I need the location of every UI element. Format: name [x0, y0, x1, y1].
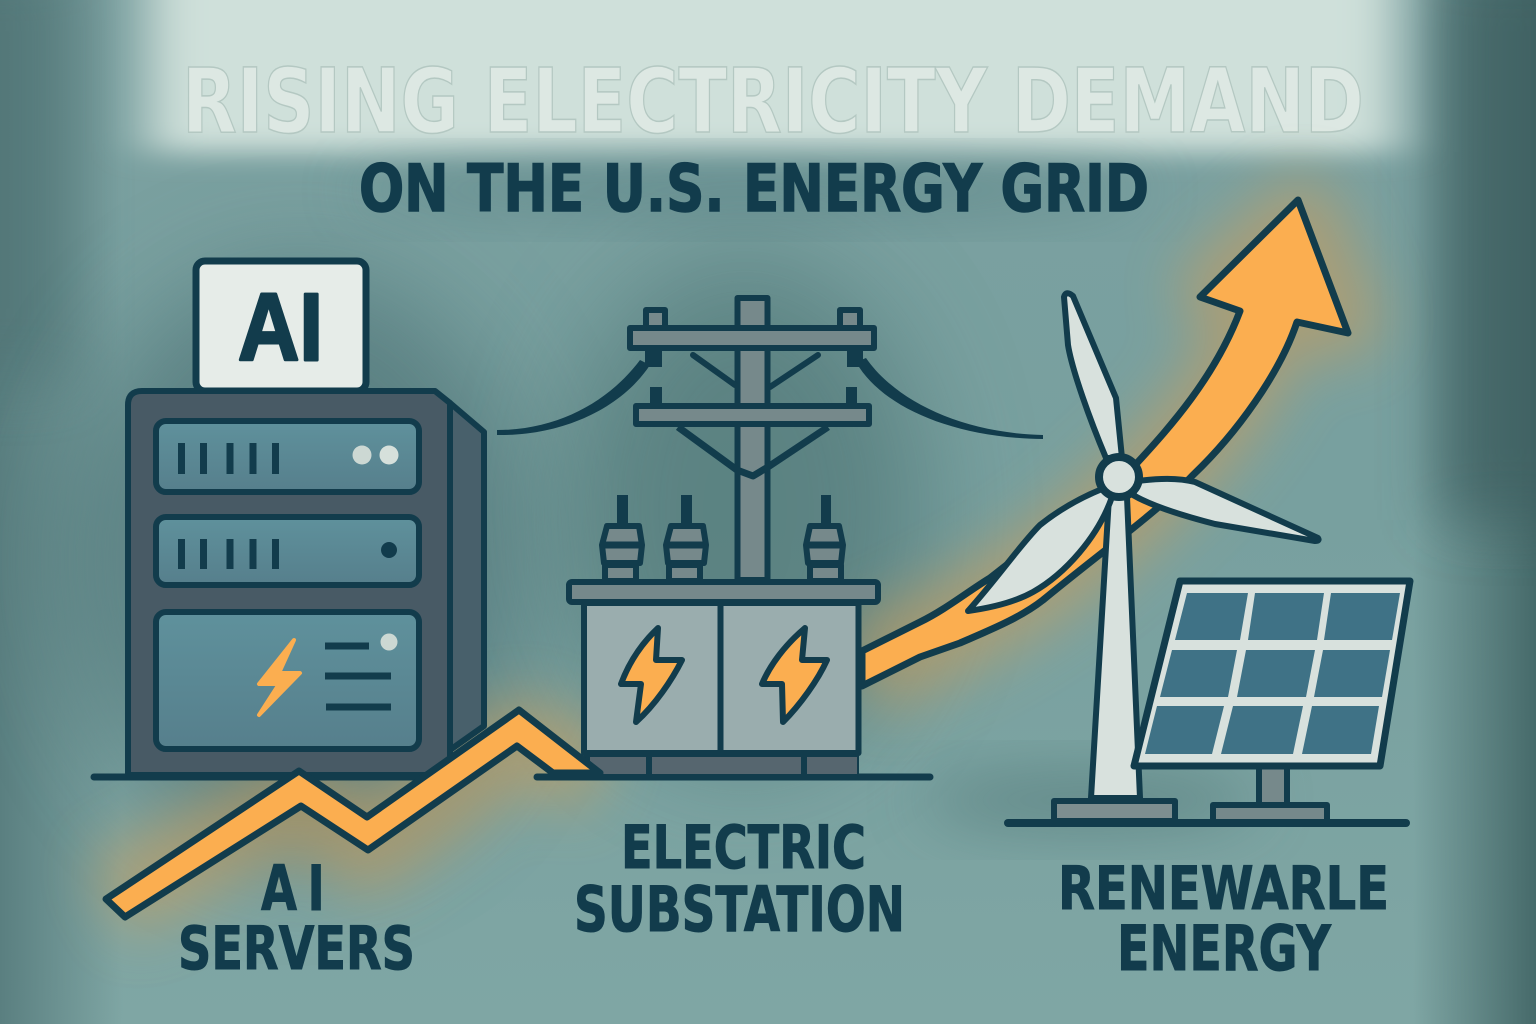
lightning bolt left	[621, 628, 682, 722]
subtitle: ON THE U.S. ENERGY GRID	[359, 152, 1149, 227]
rack body	[128, 391, 450, 775]
panel frame and cells	[1134, 581, 1410, 766]
blades	[968, 293, 1319, 611]
ground line: servers	[94, 774, 440, 780]
lower cross-arm	[636, 387, 869, 424]
AI card	[196, 261, 366, 391]
label: renewable energy	[1058, 854, 1389, 985]
ground line: renewables	[1008, 819, 1406, 827]
transformer cabinets	[584, 603, 720, 753]
pole shaft	[738, 298, 768, 580]
server unit 3	[156, 612, 419, 749]
lightning bolt right	[762, 628, 827, 722]
upper cross-arm	[630, 310, 874, 367]
cross-arm braces	[678, 355, 828, 476]
insulators	[602, 495, 843, 581]
hub	[1099, 457, 1139, 497]
main rising arrow	[862, 200, 1348, 686]
label: renewable energy: RENEWARLE	[1058, 854, 1389, 924]
label: electric substation	[574, 813, 905, 946]
label: AI servers	[178, 852, 415, 984]
transformer cap	[569, 582, 878, 602]
transformer	[569, 495, 878, 775]
power wires	[497, 358, 1043, 439]
tower	[1091, 497, 1140, 798]
server unit 2	[156, 517, 419, 585]
panel stand	[1213, 765, 1327, 822]
transformer base	[584, 750, 859, 775]
AI card: AI	[238, 274, 323, 381]
turbine base	[1054, 801, 1175, 821]
utility pole	[630, 298, 874, 580]
wind turbine	[968, 293, 1319, 821]
lower rising arrow	[106, 710, 600, 917]
orange glow behind arrows	[110, 220, 1340, 900]
solar panel	[1134, 581, 1410, 822]
label: renewable energy: ENERGY	[1117, 912, 1332, 985]
rack side	[450, 403, 484, 750]
ground line: substation	[537, 774, 930, 780]
server rack	[128, 261, 484, 775]
server unit 1	[156, 421, 419, 492]
label: electric substation: SUBSTATION	[574, 873, 905, 946]
label: AI servers: AI	[261, 852, 335, 925]
label: AI servers: SERVERS	[178, 914, 415, 984]
label: electric substation: ELECTRIC	[621, 813, 866, 883]
